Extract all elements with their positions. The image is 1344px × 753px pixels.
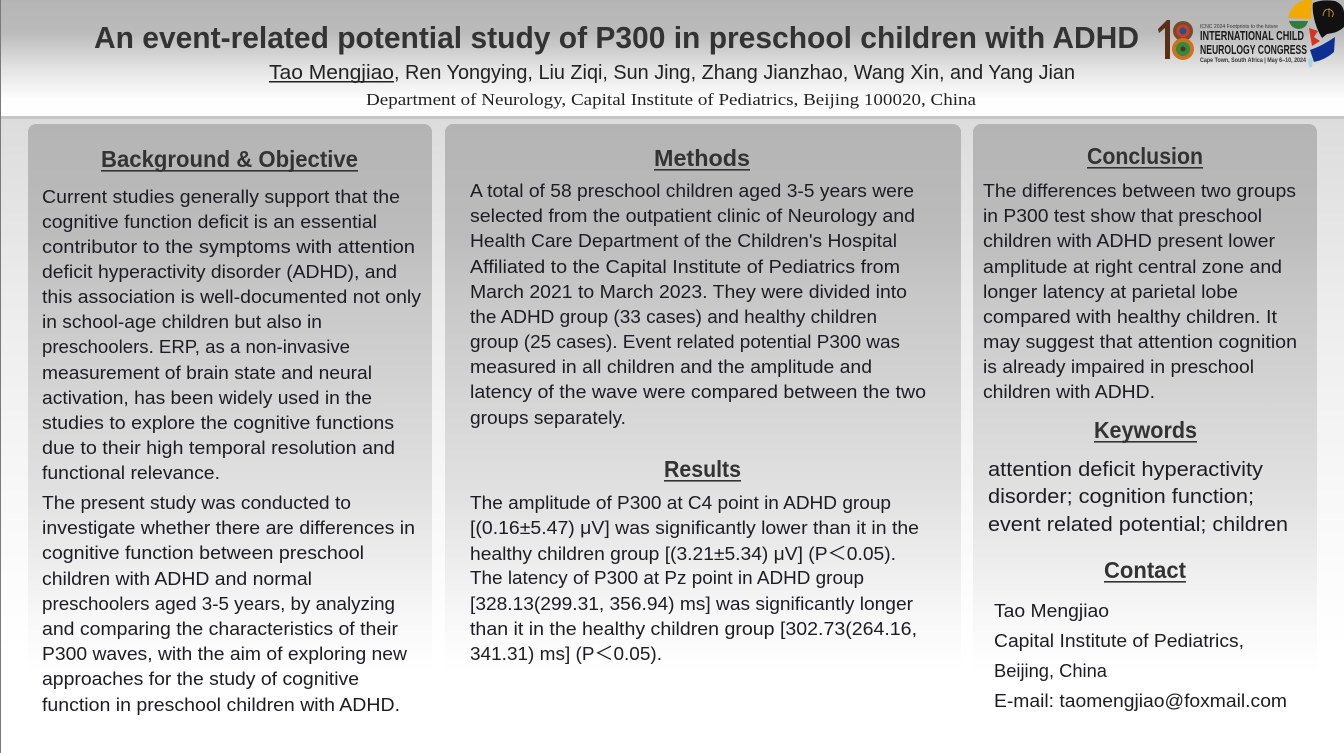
text block: background: activation, has been widely used in the (42, 387, 372, 408)
icon: congress logo (1158, 0, 1344, 67)
text block: background (42, 186, 422, 483)
text block: contact: Tao Mengjiao (994, 600, 1109, 621)
text block: objective: investigate whether there are differences in (42, 517, 415, 538)
text block: conclusion: compared with healthy children. It (983, 306, 1277, 327)
text block: background: studies to explore the cognitive functions (42, 412, 394, 433)
authors: , Ren Yongying, Liu Ziqi, Sun Jing, Zhang Jianzhao, Wang Xin, and Yang Jian (394, 62, 1075, 84)
icon: congress logo: ICNC 2024 Footprints to the future (1200, 24, 1278, 30)
affiliation: Department of Neurology, Capital Institute of Pediatrics, Beijing 100020, China (366, 90, 977, 109)
text block: background: measurement of brain state and neural (42, 362, 372, 383)
text block: methods: selected from the outpatient clinic of Neurology and (470, 205, 915, 226)
text block: keywords: disorder; cognition function; (988, 486, 1254, 508)
text block: contact: Beijing, China (994, 660, 1108, 681)
text block: background: this association is well-documented not only (42, 286, 422, 307)
text block: conclusion: The differences between two groups (983, 180, 1296, 201)
text block: methods: A total of 58 preschool children aged 3-5 years were (470, 180, 914, 201)
text block: results: [328.13(299.31, 356.94) ms] was significantly longer (470, 593, 913, 614)
text block: keywords: event related potential; children (988, 514, 1288, 536)
text block: keywords: attention deficit hyperactivity (988, 459, 1263, 481)
text block: background: cognitive function deficit is an essential (42, 211, 377, 232)
icon: congress logo: INTERNATIONAL CHILD (1200, 28, 1304, 43)
text block: objective (42, 492, 415, 715)
text block: contact: E-mail: taomengjiao@foxmail.com (994, 690, 1287, 711)
text block: objective: cognitive function between preschool (42, 542, 364, 563)
text block: objective: children with ADHD and normal (42, 568, 312, 589)
text block: results: than it in the healthy children group [302.73(264.16, (470, 618, 917, 639)
text block: results: The latency of P300 at Pz point in ADHD group (470, 567, 864, 588)
text block: methods: the ADHD group (33 cases) and healthy children (470, 306, 877, 327)
heading: background and objective: Background & Objective (101, 146, 358, 172)
text block: results (470, 492, 919, 664)
text block: objective: function in preschool children with ADHD. (42, 694, 400, 715)
text block: conclusion: may suggest that attention cognition (983, 331, 1297, 352)
text block: background: Current studies generally support that the (42, 186, 400, 207)
text block: background: deficit hyperactivity disorder (ADHD), and (42, 261, 397, 282)
heading: keywords: Keywords (1094, 417, 1197, 443)
text block: methods: group (25 cases). Event related potential P300 was (470, 331, 900, 352)
text block: methods: Affiliated to the Capital Institute of Pediatrics from (470, 256, 900, 277)
heading: results: Results (664, 456, 741, 482)
text block: conclusion: children with ADHD present lower (983, 230, 1275, 251)
heading: conclusion: Conclusion (1087, 143, 1203, 169)
text block: results: The amplitude of P300 at C4 point in ADHD group (470, 492, 891, 513)
text block: results: [(0.16±5.47) μV] was significantly lower than it in the (470, 517, 919, 538)
text block: results: 341.31) ms] (P＜0.05). (470, 643, 662, 664)
heading: methods: Methods (654, 145, 750, 171)
text block: contact (994, 600, 1287, 711)
text block: conclusion: is already impaired in preschool (983, 356, 1254, 377)
text block: background: contributor to the symptoms with attention (42, 236, 415, 257)
panel: background and objective (28, 124, 432, 720)
text block: background: functional relevance. (42, 462, 220, 483)
text block: methods: latency of the wave were compared between the two (470, 381, 926, 402)
text block: conclusion: longer latency at parietal lobe (983, 281, 1238, 302)
text block: background: preschoolers. ERP, as a non-invasive (42, 336, 350, 357)
text block: objective: and comparing the characteristics of their (42, 618, 398, 639)
text block: methods: March 2021 to March 2023. They were divided into (470, 281, 907, 302)
text block: keywords (988, 459, 1288, 536)
title: An event-related potential study of P300 in preschool children with ADHD (94, 20, 1139, 55)
text block: conclusion: amplitude at right central zone and (983, 256, 1282, 277)
text block: conclusion: in P300 test show that preschool (983, 205, 1262, 226)
text block: methods: Health Care Department of the Children's Hospital (470, 230, 897, 251)
text block: objective: The present study was conducted to (42, 492, 351, 513)
text block: objective: P300 waves, with the aim of exploring new (42, 643, 408, 664)
text block: methods (470, 180, 926, 428)
icon: congress logo: Cape Town, South Africa | May 6–10, 2024 (1200, 58, 1307, 64)
heading: contact: Contact (1104, 557, 1186, 583)
text block: background: due to their high temporal resolution and (42, 437, 395, 458)
text block: objective: approaches for the study of cognitive (42, 668, 359, 689)
text block: methods: groups separately. (470, 407, 626, 428)
text block: methods: measured in all children and the amplitude and (470, 356, 872, 377)
text block: objective: preschoolers aged 3-5 years, by analyzing (42, 593, 395, 614)
text block: contact: Capital Institute of Pediatrics, (994, 630, 1244, 651)
text block: conclusion: children with ADHD. (983, 381, 1155, 402)
text block: background: in school-age children but also in (42, 311, 322, 332)
text block: conclusion (983, 180, 1297, 402)
panel: conclusion, keywords and contact (973, 124, 1317, 720)
text block: results: healthy children group [(3.21±5.34) μV] (P＜0.05). (470, 543, 896, 564)
authors: Tao Mengjiao (269, 62, 394, 84)
panel: methods and results (445, 124, 961, 720)
